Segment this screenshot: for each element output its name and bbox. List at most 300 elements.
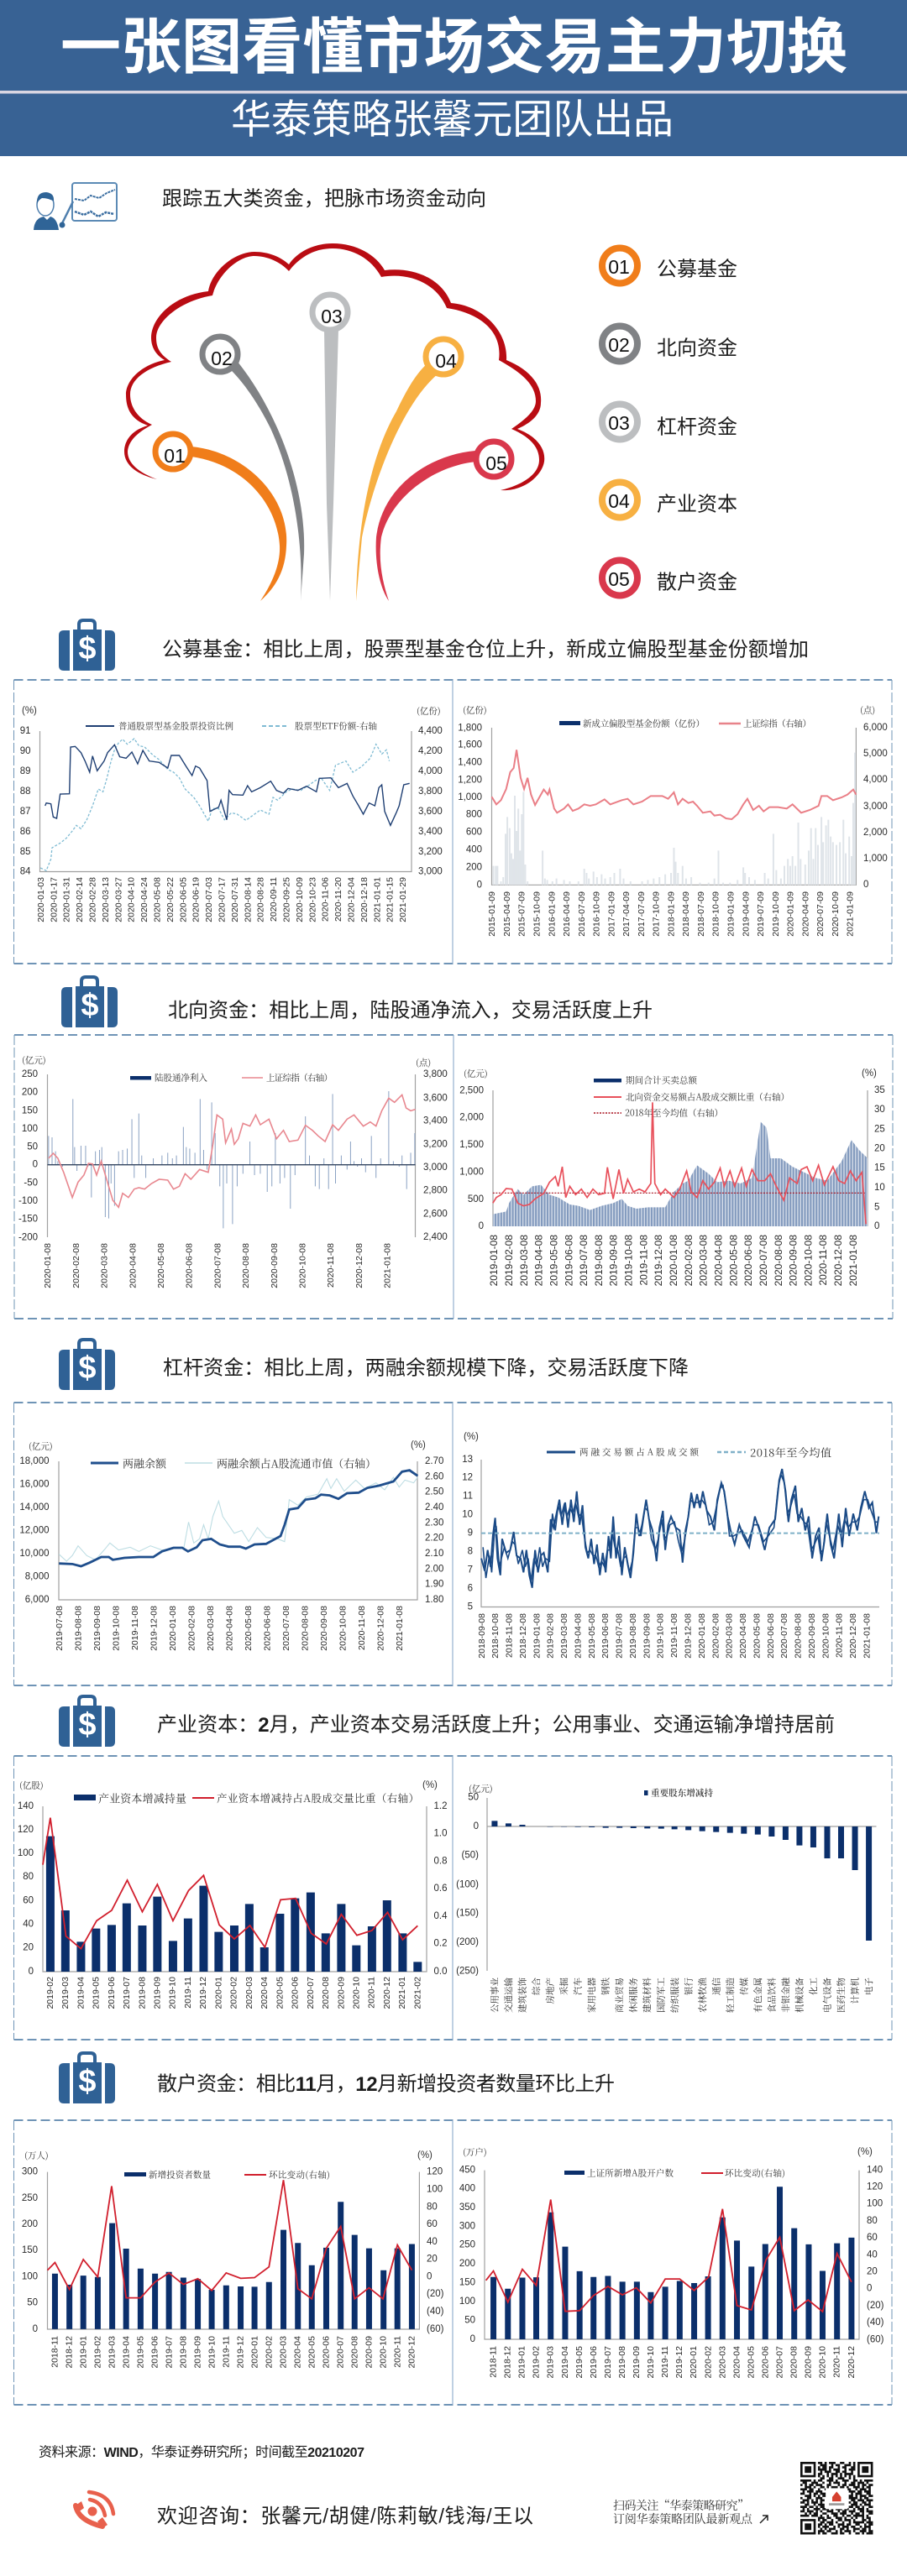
bar and line chart: Stock Connect net inflow vs SSE index: 2021-01-08 — [383, 1243, 393, 1288]
bar and line chart: new investors: 2018-12 — [64, 2336, 74, 2369]
bar and line chart: new investors: 2019-02 — [92, 2336, 102, 2369]
line chart: margin trading share of A-share turnover: 2019-12-08 — [683, 1613, 693, 1659]
line chart: equity fund position vs ETF shares: 2020-09-11 — [269, 877, 279, 922]
branch: 04 amber — [356, 339, 461, 601]
line chart: equity fund position vs ETF shares: 2020-01-03 — [36, 877, 46, 922]
line chart: margin balance and share of float cap: 2020-02-08 — [186, 1606, 197, 1651]
line chart: equity fund position vs ETF shares: 3,400 — [418, 827, 443, 837]
line chart: equity fund position vs ETF shares: 2020-09-25 — [282, 877, 292, 922]
bar and line chart: industrial capital net change: 2020-03 — [244, 1977, 254, 2009]
bar and line chart: new investors: 2019-06 — [149, 2336, 160, 2369]
line chart: margin balance and share of float cap: 2020-09-08 — [319, 1606, 329, 1651]
line chart: equity fund position vs ETF shares: 2020-04-10 — [127, 877, 137, 922]
line chart: margin trading share of A-share turnover: 2018-11-08 — [505, 1613, 515, 1658]
bar and line chart: new equity fund shares vs SSE index: 2018-07-09 — [696, 891, 706, 937]
bar and line chart: new investors: 40 — [427, 2237, 438, 2247]
line chart: margin balance and share of float cap: 2021-01-08 — [395, 1606, 405, 1651]
bar and line chart: new equity fund shares vs SSE index: 2019-10-09 — [771, 891, 781, 937]
bar and line chart: new investors: 2018-11 — [50, 2336, 60, 2368]
bar and line chart: northbound turnover and share of A-share volume: 2020-08-08 — [773, 1235, 784, 1286]
bar and line chart: northbound turnover and share of A-share volume: 2020-12-08 — [832, 1235, 844, 1286]
bar and line chart: new equity fund shares vs SSE index: 2019-07-09 — [756, 891, 766, 937]
bar and line chart: Stock Connect net inflow vs SSE index: 3,600 — [423, 1093, 448, 1103]
line chart: equity fund position vs ETF shares: 2020-01-31 — [62, 877, 72, 922]
line chart: equity fund position vs ETF shares: 2020-10-09 — [295, 877, 305, 922]
line chart: margin trading share of A-share turnover: 13 — [462, 1455, 473, 1465]
bar and line chart: new SSE A-share accounts: 2018-12 — [503, 2346, 513, 2379]
bar chart: major shareholder net change by sector: 50 — [468, 1793, 479, 1803]
line chart: equity fund position vs ETF shares: 2020-03-13 — [101, 877, 111, 922]
bar and line chart: new SSE A-share accounts: 2019-11 — [660, 2346, 670, 2378]
line chart: margin trading share of A-share turnover: 5 — [468, 1602, 473, 1612]
bar and line chart: new equity fund shares vs SSE index: 2020-07-09 — [815, 891, 826, 937]
bar chart: major shareholder net change by sector: 电气设备 — [821, 1978, 833, 2013]
icon: presenter with chart — [34, 183, 117, 230]
bar and line chart: new SSE A-share accounts: 450 — [459, 2166, 475, 2176]
bar chart: major shareholder net change by sector: (200) — [456, 1937, 479, 1947]
bar and line chart: Stock Connect net inflow vs SSE index: 2020-09-08 — [270, 1243, 280, 1288]
branch: 05 red — [376, 442, 511, 601]
line chart: margin trading share of A-share turnover: 2019-09-08 — [642, 1613, 652, 1659]
line chart: equity fund position vs ETF shares: 3,200 — [418, 847, 443, 857]
bar and line chart: industrial capital net change: 2020-05 — [275, 1977, 285, 2009]
bar and line chart: new SSE A-share accounts: (40) — [867, 2317, 884, 2328]
line chart: margin balance and share of float cap: 2020-11-08 — [357, 1606, 367, 1650]
line chart: margin trading share of A-share turnover: 2021-01-08 — [862, 1613, 872, 1659]
line chart: equity fund position vs ETF shares: 4,400 — [418, 726, 443, 736]
bar and line chart: new investors: 2019-04 — [121, 2336, 131, 2369]
bar and line chart: new SSE A-share accounts: 0 — [470, 2334, 475, 2344]
bar and line chart: new equity fund shares vs SSE index: 5,000 — [863, 749, 888, 759]
bar and line chart: new equity fund shares vs SSE index: 1,200 — [458, 775, 482, 785]
bar and line chart: northbound turnover and share of A-share volume: 2018年至今均值（右轴） — [625, 1106, 723, 1120]
bar and line chart: northbound turnover and share of A-share volume: 北向资金交易额占A股成交额比重（右轴） — [626, 1091, 789, 1103]
branch: 04 amber: 04 — [435, 350, 457, 372]
line chart: equity fund position vs ETF shares: 2020-01-17 — [49, 877, 59, 922]
bar and line chart: new investors: 2019-11 — [221, 2336, 231, 2368]
bar and line chart: northbound turnover and share of A-share volume: 2,500 — [459, 1085, 484, 1095]
bar and line chart: new SSE A-share accounts — [459, 2145, 884, 2379]
line chart: margin balance and share of float cap: 2.20 — [425, 1534, 443, 1544]
line chart: margin balance and share of float cap: 2020-07-08 — [281, 1606, 291, 1651]
bar and line chart: new equity fund shares vs SSE index: 2020-01-09 — [786, 891, 796, 937]
bar and line chart: new investors: 2020-09 — [364, 2336, 374, 2369]
bar and line chart: industrial capital net change: 2019-05 — [92, 1977, 102, 2009]
bar and line chart: Stock Connect net inflow vs SSE index: 2,400 — [423, 1232, 448, 1242]
line chart: margin balance and share of float cap: 6,000 — [25, 1595, 49, 1605]
bar and line chart: new equity fund shares vs SSE index: 2018-04-09 — [681, 891, 691, 937]
line chart: equity fund position vs ETF shares: 2020-08-28 — [256, 877, 266, 922]
bar and line chart: industrial capital net change: 2020-10 — [352, 1977, 362, 2009]
bar and line chart: new equity fund shares vs SSE index: 2016-04-09 — [562, 891, 572, 937]
bar and line chart: new equity fund shares vs SSE index: 2016-01-09 — [547, 891, 557, 937]
bar and line chart: industrial capital net change: 60 — [23, 1895, 34, 1905]
legend: capital types: 04 — [608, 490, 630, 512]
icon: briefcase: $ — [78, 631, 97, 666]
line chart: equity fund position vs ETF shares: 84 — [20, 866, 31, 876]
bar and line chart: new investors: 新增投资者数量 — [149, 2169, 211, 2181]
bar chart: major shareholder net change by sector: 采掘 — [558, 1978, 570, 1995]
bar chart: major shareholder net change by sector: 轻工制造 — [724, 1978, 737, 2013]
line chart: margin balance and share of float cap: 2020-10-08 — [338, 1606, 348, 1651]
bar and line chart: industrial capital net change: 2020-11 — [367, 1977, 377, 2009]
bar chart: major shareholder net change by sector: 建筑材料 — [641, 1978, 653, 2013]
bar and line chart: Stock Connect net inflow vs SSE index: 3,800 — [423, 1069, 448, 1079]
bar and line chart: industrial capital net change: 2019-06 — [107, 1977, 117, 2009]
bar and line chart: industrial capital net change: 1.0 — [433, 1828, 447, 1838]
subtitle: 华泰策略张馨元团队出品 — [231, 97, 674, 143]
bar and line chart: new investors: 2020-12 — [406, 2336, 417, 2369]
line chart: equity fund position vs ETF shares: 2020-02-14 — [75, 877, 85, 922]
line chart: margin trading share of A-share turnover: 2018年至今均值 — [750, 1444, 831, 1460]
line chart: margin trading share of A-share turnover: 2019-04-08 — [573, 1613, 583, 1659]
bar and line chart: new SSE A-share accounts: 60 — [867, 2233, 878, 2243]
section: northbound capital — [14, 977, 893, 1319]
line chart: equity fund position vs ETF shares: 2021-01-15 — [385, 877, 396, 922]
bar and line chart: new SSE A-share accounts: 上证所新增A股开户数 — [587, 2167, 674, 2179]
line chart: margin balance and share of float cap: 2.60 — [425, 1471, 443, 1481]
fan diagram — [124, 243, 544, 601]
bar and line chart: new SSE A-share accounts: 2019-08 — [617, 2346, 627, 2379]
section: industrial capital — [13, 1696, 892, 2040]
bar and line chart: new equity fund shares vs SSE index: 1,600 — [458, 740, 482, 750]
bar chart: major shareholder net change by sector: 银行 — [682, 1978, 695, 1995]
contact text: 欢迎咨询：张馨元/胡健/陈莉敏/钱海/王以 — [157, 2505, 533, 2528]
intro text: 跟踪五大类资金，把脉市场资金动向 — [162, 188, 486, 210]
branch: 02 gray — [202, 337, 304, 601]
bar and line chart: new SSE A-share accounts: 80 — [867, 2216, 878, 2226]
bar and line chart: industrial capital net change: 2019-03 — [60, 1977, 71, 2009]
bar and line chart: new investors: 60 — [427, 2219, 438, 2229]
line chart: margin balance and share of float cap: 2.00 — [425, 1564, 443, 1574]
bar and line chart: new equity fund shares vs SSE index: 2015-04-09 — [502, 891, 512, 937]
bar and line chart: northbound turnover and share of A-share volume: 2019-02-08 — [503, 1235, 515, 1286]
line chart: margin balance and share of float cap: 2020-12-08 — [375, 1606, 385, 1651]
bar and line chart: new SSE A-share accounts: 100 — [459, 2296, 475, 2307]
bar and line chart: new SSE A-share accounts: 2019-10 — [646, 2346, 656, 2379]
line chart: equity fund position vs ETF shares: 2020-05-08 — [153, 877, 163, 922]
line chart: margin balance and share of float cap: 2019-09-08 — [92, 1606, 102, 1651]
bar and line chart: industrial capital net change: 2021-01 — [397, 1977, 407, 2009]
bar and line chart: new equity fund shares vs SSE index: 2020-04-09 — [800, 891, 810, 937]
line chart: equity fund position vs ETF shares: 4,000 — [418, 766, 443, 776]
bar chart: major shareholder net change by sector: 休闲服务 — [627, 1978, 640, 2013]
bar and line chart: new investors: 2020-06 — [321, 2336, 331, 2369]
bar and line chart: Stock Connect net inflow vs SSE index: 2,600 — [423, 1209, 448, 1219]
bar and line chart: new SSE A-share accounts: 20 — [867, 2266, 878, 2276]
line chart: margin balance and share of float cap: 8,000 — [25, 1572, 49, 1582]
line chart: margin trading share of A-share turnover: 8 — [468, 1547, 473, 1557]
line chart: equity fund position vs ETF shares: 2020-08-14 — [243, 877, 253, 922]
line chart: margin trading share of A-share turnover: 2019-01-08 — [532, 1613, 542, 1659]
legend: capital types: 05 — [608, 568, 630, 590]
bar and line chart: Stock Connect net inflow vs SSE index: 3,200 — [423, 1139, 448, 1149]
bar chart: major shareholder net change by sector: 计算机 — [848, 1978, 862, 2004]
title: 一张图看懂市场交易主力切换 — [60, 14, 847, 81]
panel frame — [13, 2120, 892, 2405]
bar chart: major shareholder net change by sector: 汽车 — [571, 1978, 585, 1995]
bar and line chart: new SSE A-share accounts: 2020-06 — [760, 2346, 770, 2379]
icon: briefcase: $ — [81, 988, 99, 1023]
line chart: margin balance and share of float cap — [19, 1440, 443, 1651]
bar and line chart: new SSE A-share accounts: 200 — [459, 2259, 475, 2269]
bar and line chart: new SSE A-share accounts: 100 — [867, 2199, 883, 2209]
line chart: margin balance and share of float cap: 14,000 — [19, 1502, 49, 1513]
bar and line chart: industrial capital net change: 80 — [23, 1872, 34, 1882]
bar and line chart: new investors: 2020-10 — [378, 2336, 388, 2369]
bar and line chart: new investors: 2019-10 — [207, 2336, 217, 2369]
bar and line chart: northbound turnover and share of A-share volume: 2019-09-08 — [608, 1235, 620, 1286]
line chart: margin trading share of A-share turnover: 2018-09-08 — [477, 1613, 487, 1659]
bar and line chart: new SSE A-share accounts: 300 — [459, 2222, 475, 2232]
bar and line chart: new SSE A-share accounts: 350 — [459, 2202, 475, 2213]
panel frame — [13, 1403, 892, 1685]
bar and line chart: Stock Connect net inflow vs SSE index: -50 — [24, 1178, 38, 1188]
icon: briefcase: $ — [78, 1351, 97, 1386]
bar and line chart: Stock Connect net inflow vs SSE index: (点) — [416, 1056, 431, 1069]
bar chart: major shareholder net change by sector — [456, 1783, 877, 2013]
line chart: equity fund position vs ETF shares: 2021-01-01 — [372, 877, 382, 922]
line chart: equity fund position vs ETF shares: 3,800 — [418, 786, 443, 797]
bar and line chart: new investors: 50 — [27, 2298, 38, 2308]
heading: 产业资本：2月，产业资本交易活跃度上升；公用事业、交通运输净增持居前 — [157, 1714, 835, 1736]
bar and line chart: industrial capital net change — [18, 1779, 448, 2009]
bar and line chart: new equity fund shares vs SSE index: 1,000 — [458, 792, 482, 802]
line chart: equity fund position vs ETF shares: 2020-07-03 — [204, 877, 214, 922]
line chart: margin balance and share of float cap: 2.30 — [425, 1518, 443, 1528]
bar and line chart: northbound turnover and share of A-share volume: 2,000 — [459, 1113, 484, 1123]
bar and line chart: new equity fund shares vs SSE index: 2015-07-09 — [517, 891, 527, 937]
bar chart: major shareholder net change by sector: 交通运输 — [502, 1978, 515, 2013]
line chart: margin trading share of A-share turnover: 2020-04-08 — [738, 1613, 748, 1659]
bar and line chart: new equity fund shares vs SSE index: 2017-04-09 — [621, 891, 632, 937]
line chart: equity fund position vs ETF shares: 2020-06-05 — [178, 877, 188, 922]
bar and line chart: northbound turnover and share of A-share volume: 0 — [479, 1221, 484, 1231]
bar and line chart: Stock Connect net inflow vs SSE index: 2020-05-08 — [156, 1243, 166, 1288]
bar and line chart: Stock Connect net inflow vs SSE index: (亿元) — [22, 1054, 46, 1066]
line chart: equity fund position vs ETF shares: 2020-12-18 — [359, 877, 370, 922]
bar and line chart: Stock Connect net inflow vs SSE index: 2020-06-08 — [185, 1243, 195, 1288]
line chart: margin trading share of A-share turnover: (%) — [464, 1432, 479, 1442]
bar and line chart: Stock Connect net inflow vs SSE index: 上证综指（右轴） — [266, 1071, 333, 1084]
section: retail capital — [13, 2053, 892, 2405]
bar chart: major shareholder net change by sector: 商业贸易 — [613, 1978, 626, 2013]
line chart: margin trading share of A-share turnover: 2019-02-08 — [546, 1613, 556, 1659]
bar and line chart: Stock Connect net inflow vs SSE index: 50 — [27, 1142, 38, 1152]
bar and line chart: new equity fund shares vs SSE index: 新成立偏股型基金份额（亿份） — [583, 717, 705, 730]
bar chart: major shareholder net change by sector: 综合 — [530, 1978, 543, 1995]
bar chart: major shareholder net change by sector: 家用电器 — [585, 1978, 598, 2013]
line chart: equity fund position vs ETF shares: (亿份) — [417, 705, 441, 717]
bar and line chart: industrial capital net change: 2019-12 — [198, 1977, 208, 2009]
bar and line chart: new SSE A-share accounts: 40 — [867, 2249, 878, 2260]
bar and line chart: Stock Connect net inflow vs SSE index: 2020-12-08 — [354, 1243, 364, 1288]
line chart: margin balance and share of float cap: 2.10 — [425, 1549, 443, 1559]
line chart: margin trading share of A-share turnover: 2020-06-08 — [766, 1613, 776, 1659]
bar and line chart: industrial capital net change: 2020-02 — [229, 1977, 239, 2009]
bar and line chart: Stock Connect net inflow vs SSE index: 200 — [22, 1088, 38, 1098]
bar and line chart: new SSE A-share accounts: 2019-01 — [517, 2346, 527, 2379]
line chart: margin trading share of A-share turnover: 2019-03-08 — [559, 1613, 569, 1659]
line chart: equity fund position vs ETF shares: 90 — [20, 746, 30, 756]
branch: 05 red: 05 — [485, 452, 507, 474]
bar and line chart: industrial capital net change: 20 — [23, 1943, 34, 1953]
QR code — [800, 2463, 873, 2533]
icon: briefcase — [59, 2053, 115, 2103]
bar and line chart: new equity fund shares vs SSE index: 2015-10-09 — [532, 891, 543, 937]
bar and line chart: industrial capital net change: 2019-02 — [45, 1977, 55, 2009]
line chart: margin trading share of A-share turnover: 10 — [462, 1510, 473, 1520]
bar and line chart: industrial capital net change: 2019-08 — [137, 1977, 147, 2009]
line chart: equity fund position vs ETF shares: 2021-01-29 — [398, 877, 408, 922]
bar and line chart: new investors: 80 — [427, 2202, 438, 2212]
bar and line chart: northbound turnover and share of A-share volume: 2020-11-08 — [817, 1235, 829, 1286]
bar and line chart: northbound turnover and share of A-share volume: 2019-12-08 — [653, 1235, 664, 1286]
bar and line chart: new equity fund shares vs SSE index: 4,000 — [863, 775, 888, 785]
bar and line chart: northbound turnover and share of A-share volume: 2020-02-08 — [683, 1235, 695, 1286]
bar and line chart: industrial capital net change: 2019-09 — [153, 1977, 163, 2009]
bar and line chart: new equity fund shares vs SSE index: 2017-01-09 — [606, 891, 616, 937]
section: leveraged capital — [13, 1340, 892, 1685]
bar and line chart: northbound turnover and share of A-share volume: 5 — [874, 1202, 879, 1212]
panel frame — [14, 1035, 893, 1319]
line chart: margin balance and share of float cap: 2020-04-08 — [224, 1606, 234, 1651]
bar and line chart: industrial capital net change: 0 — [29, 1967, 34, 1977]
bar and line chart: Stock Connect net inflow vs SSE index — [18, 1054, 448, 1288]
bar and line chart: new investors: 2020-04 — [292, 2336, 302, 2369]
line chart: equity fund position vs ETF shares: 3,600 — [418, 807, 443, 817]
legend: capital types: 02 — [608, 334, 630, 356]
heading: 散户资金：相比11月，12月新增投资者数量环比上升 — [157, 2073, 615, 2095]
bar and line chart: new SSE A-share accounts: 2019-06 — [589, 2346, 599, 2379]
bar and line chart: Stock Connect net inflow vs SSE index: 2020-08-08 — [241, 1243, 251, 1288]
line chart: equity fund position vs ETF shares: 86 — [20, 827, 30, 837]
bar and line chart: new equity fund shares vs SSE index: 1,000 — [863, 854, 888, 864]
bar and line chart: industrial capital net change: 2020-08 — [321, 1977, 331, 2009]
bar and line chart: new SSE A-share accounts: 2020-05 — [746, 2346, 756, 2379]
section: public funds — [13, 620, 892, 964]
line chart: margin trading share of A-share turnover: 2019-05-08 — [587, 1613, 597, 1659]
line chart: margin trading share of A-share turnover: 2020-09-08 — [807, 1613, 817, 1659]
line chart: margin balance and share of float cap: 1.80 — [425, 1595, 443, 1605]
bar and line chart: northbound turnover and share of A-share volume: 2019-10-08 — [623, 1235, 635, 1286]
line chart: margin balance and share of float cap: 2.70 — [425, 1456, 443, 1466]
bar and line chart: new investors — [22, 2149, 444, 2369]
cloud outline — [124, 243, 544, 490]
line chart: margin balance and share of float cap: 2020-06-08 — [262, 1606, 272, 1651]
bar and line chart: northbound turnover and share of A-share volume: 10 — [874, 1183, 885, 1193]
line chart: equity fund position vs ETF shares: 91 — [20, 726, 30, 736]
footer source note: 资料来源：WIND，华泰证券研究所；时间截至20210207 — [39, 2444, 364, 2459]
bar and line chart: industrial capital net change: 0.0 — [433, 1967, 447, 1977]
line chart: margin balance and share of float cap: (%) — [411, 1440, 426, 1450]
header banner — [0, 0, 907, 156]
line chart: margin balance and share of float cap: 2.50 — [425, 1487, 443, 1497]
bar and line chart: Stock Connect net inflow vs SSE index: 2020-11-08 — [326, 1243, 336, 1288]
bar and line chart: new investors: 2019-01 — [78, 2336, 88, 2369]
line chart: margin trading share of A-share turnover: 2020-08-08 — [794, 1613, 804, 1659]
bar and line chart: northbound turnover and share of A-share volume: 2019-08-08 — [593, 1235, 605, 1286]
bar and line chart: new investors: 120 — [427, 2167, 443, 2177]
bar and line chart: new SSE A-share accounts: 2020-01 — [689, 2346, 699, 2379]
bar and line chart: industrial capital net change: 40 — [23, 1920, 34, 1930]
bar chart: major shareholder net change by sector: 建筑装饰 — [516, 1978, 529, 2013]
bar and line chart: new investors: 2020-08 — [349, 2336, 359, 2369]
branch: 01 orange: 01 — [164, 445, 186, 467]
bar chart: major shareholder net change by sector: 房地产 — [544, 1978, 556, 2004]
line chart: margin balance and share of float cap: 2019-07-08 — [55, 1606, 65, 1651]
bar and line chart: Stock Connect net inflow vs SSE index: 2020-03-08 — [100, 1243, 110, 1288]
icon: briefcase: $ — [78, 2064, 97, 2099]
bar and line chart: new equity fund shares vs SSE index: 1,400 — [458, 758, 482, 768]
bar and line chart: northbound turnover and share of A-share volume: 25 — [874, 1125, 885, 1135]
bar and line chart: industrial capital net change: 2020-12 — [382, 1977, 392, 2009]
bar and line chart: new equity fund shares vs SSE index: 2019-04-09 — [741, 891, 751, 937]
bar and line chart: industrial capital net change: 2020-01 — [213, 1977, 223, 2009]
line chart: margin balance and share of float cap: (亿元) — [29, 1440, 53, 1452]
bar and line chart: new SSE A-share accounts: 2019-12 — [674, 2346, 684, 2379]
heading: 北向资金：相比上周，陆股通净流入，交易活跃度上升 — [168, 999, 653, 1022]
line chart: equity fund position vs ETF shares: 2020-11-20 — [333, 877, 343, 922]
line chart: margin trading share of A-share turnover: 7 — [468, 1565, 473, 1575]
line chart: equity fund position vs ETF shares: 4,200 — [418, 746, 443, 756]
line chart: equity fund position vs ETF shares: (%) — [22, 706, 37, 716]
line chart: equity fund position vs ETF shares: 2020-07-31 — [230, 877, 240, 922]
bar and line chart: new equity fund shares vs SSE index: 600 — [466, 828, 482, 838]
bar and line chart: industrial capital net change: 2020-04 — [260, 1977, 270, 2009]
bar and line chart: new investors: 2020-02 — [264, 2336, 274, 2369]
bar and line chart: northbound turnover and share of A-share volume: 2020-07-08 — [758, 1235, 769, 1286]
legend: capital types: 北向资金 — [657, 337, 737, 359]
bar and line chart: northbound turnover and share of A-share volume: 1,000 — [459, 1168, 484, 1178]
bar and line chart: new SSE A-share accounts: 2020-02 — [703, 2346, 713, 2379]
bar and line chart: new equity fund shares vs SSE index: 2018-01-09 — [666, 891, 676, 937]
bar and line chart: new SSE A-share accounts: 120 — [867, 2182, 883, 2192]
bar and line chart: new SSE A-share accounts: (20) — [867, 2301, 884, 2311]
bar and line chart: industrial capital net change: 0.2 — [433, 1939, 447, 1949]
bar and line chart: new SSE A-share accounts: 140 — [867, 2166, 883, 2176]
QR caption: 订阅华泰策略团队最新观点 — [613, 2511, 753, 2527]
bar and line chart: new equity fund shares vs SSE index: 2017-10-09 — [652, 891, 662, 937]
bar and line chart: industrial capital net change: 140 — [18, 1801, 34, 1811]
bar and line chart: northbound turnover and share of A-share volume: 2019-04-08 — [533, 1235, 545, 1286]
bar and line chart: new investors: (60) — [427, 2324, 444, 2334]
bar and line chart: northbound turnover and share of A-share volume: 0 — [874, 1221, 879, 1231]
line chart: margin trading share of A-share turnover: 2020-01-08 — [697, 1613, 707, 1659]
bar and line chart: Stock Connect net inflow vs SSE index: 2020-04-08 — [128, 1243, 138, 1288]
bar and line chart: northbound turnover and share of A-share volume: 2020-06-08 — [742, 1235, 754, 1286]
bar and line chart: new investors: 2019-05 — [135, 2336, 145, 2369]
line chart: margin balance and share of float cap: 2019-10-08 — [111, 1606, 121, 1651]
line chart: equity fund position vs ETF shares: 2020-11-06 — [321, 877, 331, 922]
bar and line chart: northbound turnover and share of A-share volume: (亿元) — [464, 1068, 488, 1079]
bar and line chart: new equity fund shares vs SSE index: 上证综指（右轴） — [743, 717, 811, 730]
bar chart: major shareholder net change by sector: 国防军工 — [655, 1978, 667, 2013]
bar and line chart: new equity fund shares vs SSE index: 2016-07-09 — [577, 891, 587, 937]
bar and line chart: industrial capital net change: 0.6 — [433, 1884, 447, 1894]
bar and line chart: Stock Connect net inflow vs SSE index: -200 — [18, 1232, 38, 1242]
legend: capital types: 03 — [608, 412, 630, 434]
line chart: margin balance and share of float cap: 2019-11-08 — [130, 1606, 140, 1650]
bar and line chart: new SSE A-share accounts: 2019-07 — [603, 2346, 613, 2379]
line chart: equity fund position vs ETF shares: 85 — [20, 847, 30, 857]
line chart: margin balance and share of float cap: 2019-12-08 — [149, 1606, 159, 1651]
bar and line chart: new equity fund shares vs SSE index: 0 — [863, 880, 868, 890]
bar and line chart: northbound turnover and share of A-share volume: 35 — [874, 1085, 885, 1095]
line chart: equity fund position vs ETF shares: 股票型ETF份额-右轴 — [295, 720, 378, 732]
bar and line chart: new SSE A-share accounts: 0 — [867, 2283, 872, 2293]
bar and line chart: new equity fund shares vs SSE index: 6,000 — [863, 723, 888, 733]
